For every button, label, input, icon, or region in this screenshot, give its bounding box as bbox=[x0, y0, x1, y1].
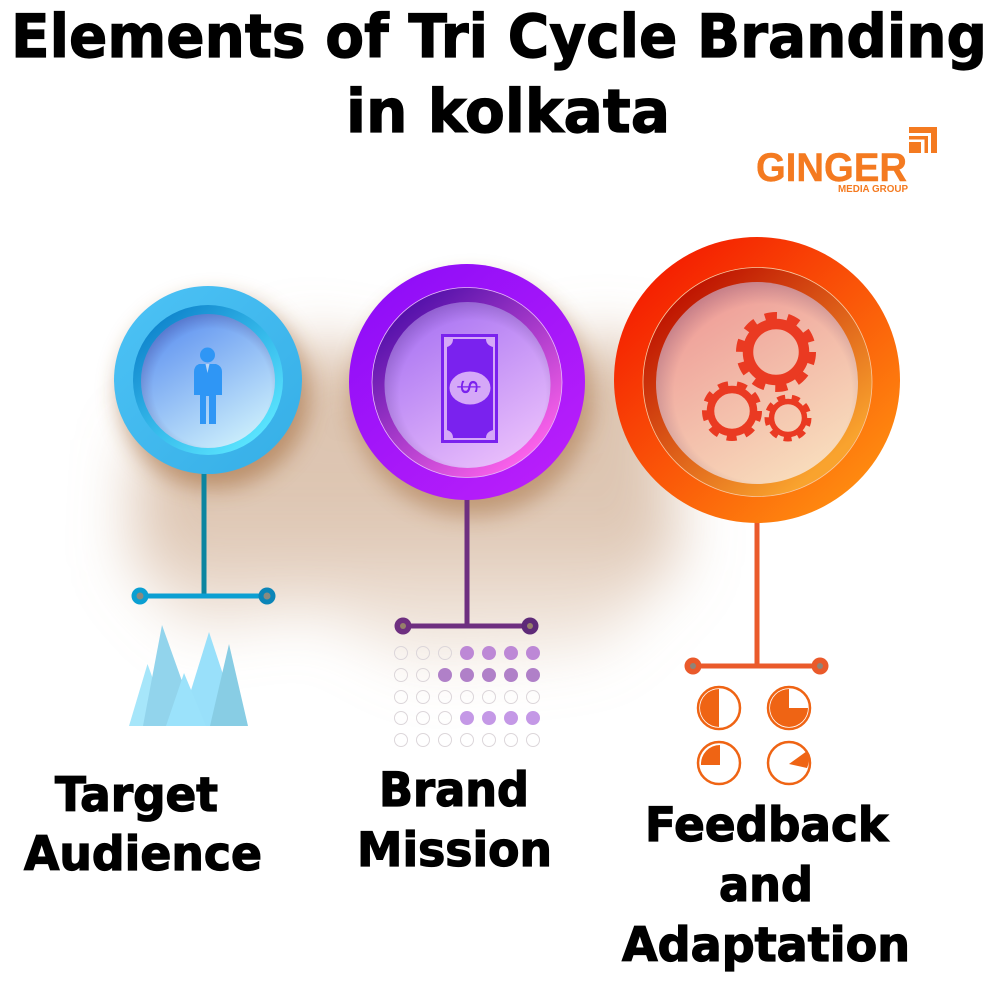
panel: feedback and adaptation bbox=[614, 237, 910, 973]
icon: banknote bbox=[441, 334, 498, 443]
dot matrix chart bbox=[394, 646, 540, 746]
logo: Ginger Media Group bbox=[756, 127, 937, 195]
label: Mission bbox=[357, 823, 552, 878]
circle badge: banknote icon bbox=[349, 264, 585, 500]
icon: mountain chart bbox=[129, 625, 248, 726]
background shadow glow bbox=[118, 276, 680, 670]
label: Audience bbox=[24, 827, 262, 882]
label: and bbox=[719, 858, 813, 913]
circle badge: gears icon bbox=[614, 237, 900, 523]
logo icon bbox=[909, 127, 937, 153]
circle badge: person icon bbox=[114, 286, 302, 474]
logo wordmark: GINGER bbox=[756, 146, 907, 190]
label: Feedback bbox=[645, 798, 890, 853]
label bbox=[357, 763, 552, 878]
label bbox=[622, 798, 910, 973]
label: Target bbox=[55, 768, 218, 823]
logo tagline: MEDIA GROUP bbox=[838, 184, 908, 195]
icon: person in suit bbox=[194, 348, 222, 424]
pie icons bbox=[698, 687, 810, 784]
title bbox=[11, 2, 987, 147]
stem connector bbox=[684, 518, 828, 674]
pie: small wedge bbox=[768, 742, 810, 784]
pie: half bbox=[698, 687, 740, 729]
label: Adaptation bbox=[622, 918, 910, 973]
stem connector bbox=[132, 470, 276, 604]
stem connector bbox=[394, 498, 538, 634]
panel: target audience bbox=[24, 286, 302, 882]
pie: one quarter bbox=[698, 742, 740, 784]
icon: gears bbox=[705, 316, 812, 439]
pie: three quarters bbox=[768, 687, 810, 729]
title: in kolkata bbox=[346, 77, 670, 147]
panel: brand mission bbox=[349, 264, 585, 878]
icon: banknote: $ bbox=[454, 379, 484, 395]
label: Brand bbox=[379, 763, 529, 818]
label bbox=[24, 768, 262, 882]
